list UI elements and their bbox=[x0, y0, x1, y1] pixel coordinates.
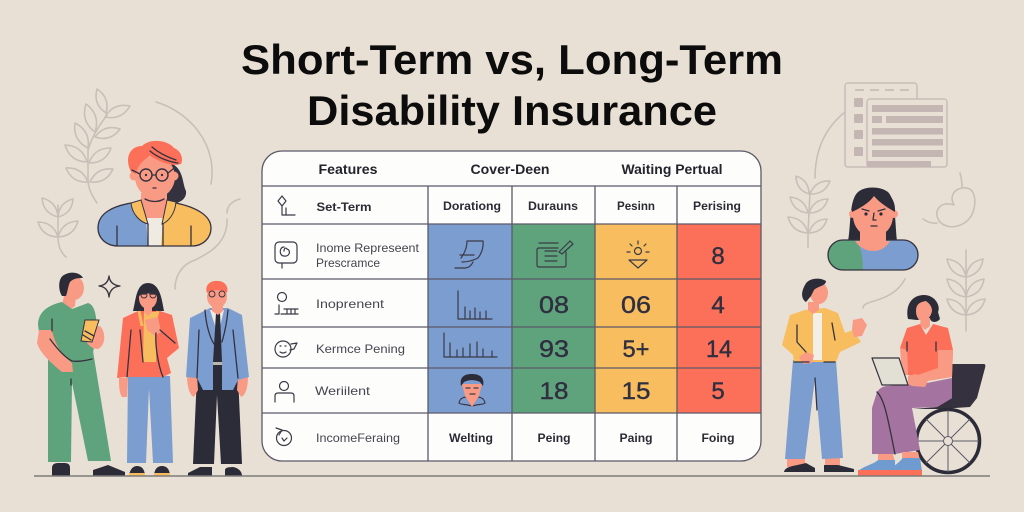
grid lines bbox=[262, 151, 761, 461]
person: man in blue suit bbox=[186, 281, 249, 476]
row: Kermce Pening: 14 bbox=[706, 336, 732, 363]
title: Short-Term vs, Long-Term bbox=[241, 36, 783, 83]
row: IncomeFeraing: Foing bbox=[702, 431, 734, 445]
row: Inome Represeent: Prescramce bbox=[316, 256, 380, 270]
row: Inome Represeent: Inome Represeent bbox=[316, 241, 420, 255]
person: woman in wheelchair with laptop bbox=[858, 295, 985, 476]
row: Set-Term: Perising bbox=[693, 199, 741, 213]
row: Set-Term: Dorationg bbox=[443, 199, 501, 213]
row: Set-Term: Durauns bbox=[528, 199, 578, 213]
person: woman in red jacket bbox=[117, 283, 179, 476]
title: Disability Insurance bbox=[307, 87, 717, 134]
row: Set-Term: Set-Term bbox=[316, 200, 372, 214]
row: IncomeFeraing: Peing bbox=[538, 431, 570, 445]
row: IncomeFeraing: Paing bbox=[620, 431, 652, 445]
header row bbox=[318, 162, 722, 177]
row: Kermce Pening: 93 bbox=[539, 336, 569, 363]
row: Inoprenent: Inoprenent bbox=[316, 297, 385, 311]
header row: Features bbox=[318, 162, 378, 177]
row: Inome Represeent bbox=[275, 241, 725, 270]
row: Set-Term bbox=[278, 196, 741, 215]
row: Inoprenent: 08 bbox=[539, 292, 569, 319]
row: Kermce Pening: 5+ bbox=[622, 336, 650, 363]
row: Kermce Pening bbox=[275, 333, 732, 363]
colored data cells bbox=[428, 224, 761, 413]
header row: Cover-Deen bbox=[470, 162, 550, 177]
person: man in green scrubs with phone bbox=[37, 273, 125, 476]
row: Set-Term: Pesinn bbox=[617, 199, 655, 213]
person bust: woman with dark hair bbox=[828, 188, 918, 270]
decorative plants and curves, right bbox=[785, 112, 988, 331]
row: Inoprenent bbox=[275, 291, 725, 319]
row: IncomeFeraing bbox=[276, 428, 734, 446]
row: Weriilent: 5 bbox=[711, 378, 725, 405]
header row: Waiting Pertual bbox=[622, 162, 722, 177]
comparison table bbox=[262, 151, 761, 461]
row: Inoprenent: 4 bbox=[711, 292, 725, 319]
person bust: woman with red hair and glasses bbox=[98, 141, 211, 246]
ground line bbox=[34, 475, 990, 477]
row: Weriilent: 18 bbox=[540, 378, 568, 405]
row: IncomeFeraing: IncomeFeraing bbox=[316, 431, 400, 445]
sparkle bbox=[99, 276, 120, 297]
row: IncomeFeraing: Welting bbox=[449, 431, 493, 445]
decorative documents icon bbox=[845, 83, 947, 167]
row: Inome Represeent: 8 bbox=[711, 243, 725, 270]
row: Weriilent: 15 bbox=[622, 378, 650, 405]
row: Weriilent bbox=[275, 374, 725, 407]
row: Kermce Pening: Kermce Pening bbox=[316, 342, 405, 356]
decorative plants and curves, left bbox=[35, 87, 240, 289]
title bbox=[241, 36, 783, 134]
row: Inoprenent: 06 bbox=[621, 292, 651, 319]
person: standing person in yellow jacket bbox=[782, 279, 867, 472]
wheelchair bbox=[913, 364, 985, 472]
row: Weriilent: Weriilent bbox=[315, 384, 371, 398]
